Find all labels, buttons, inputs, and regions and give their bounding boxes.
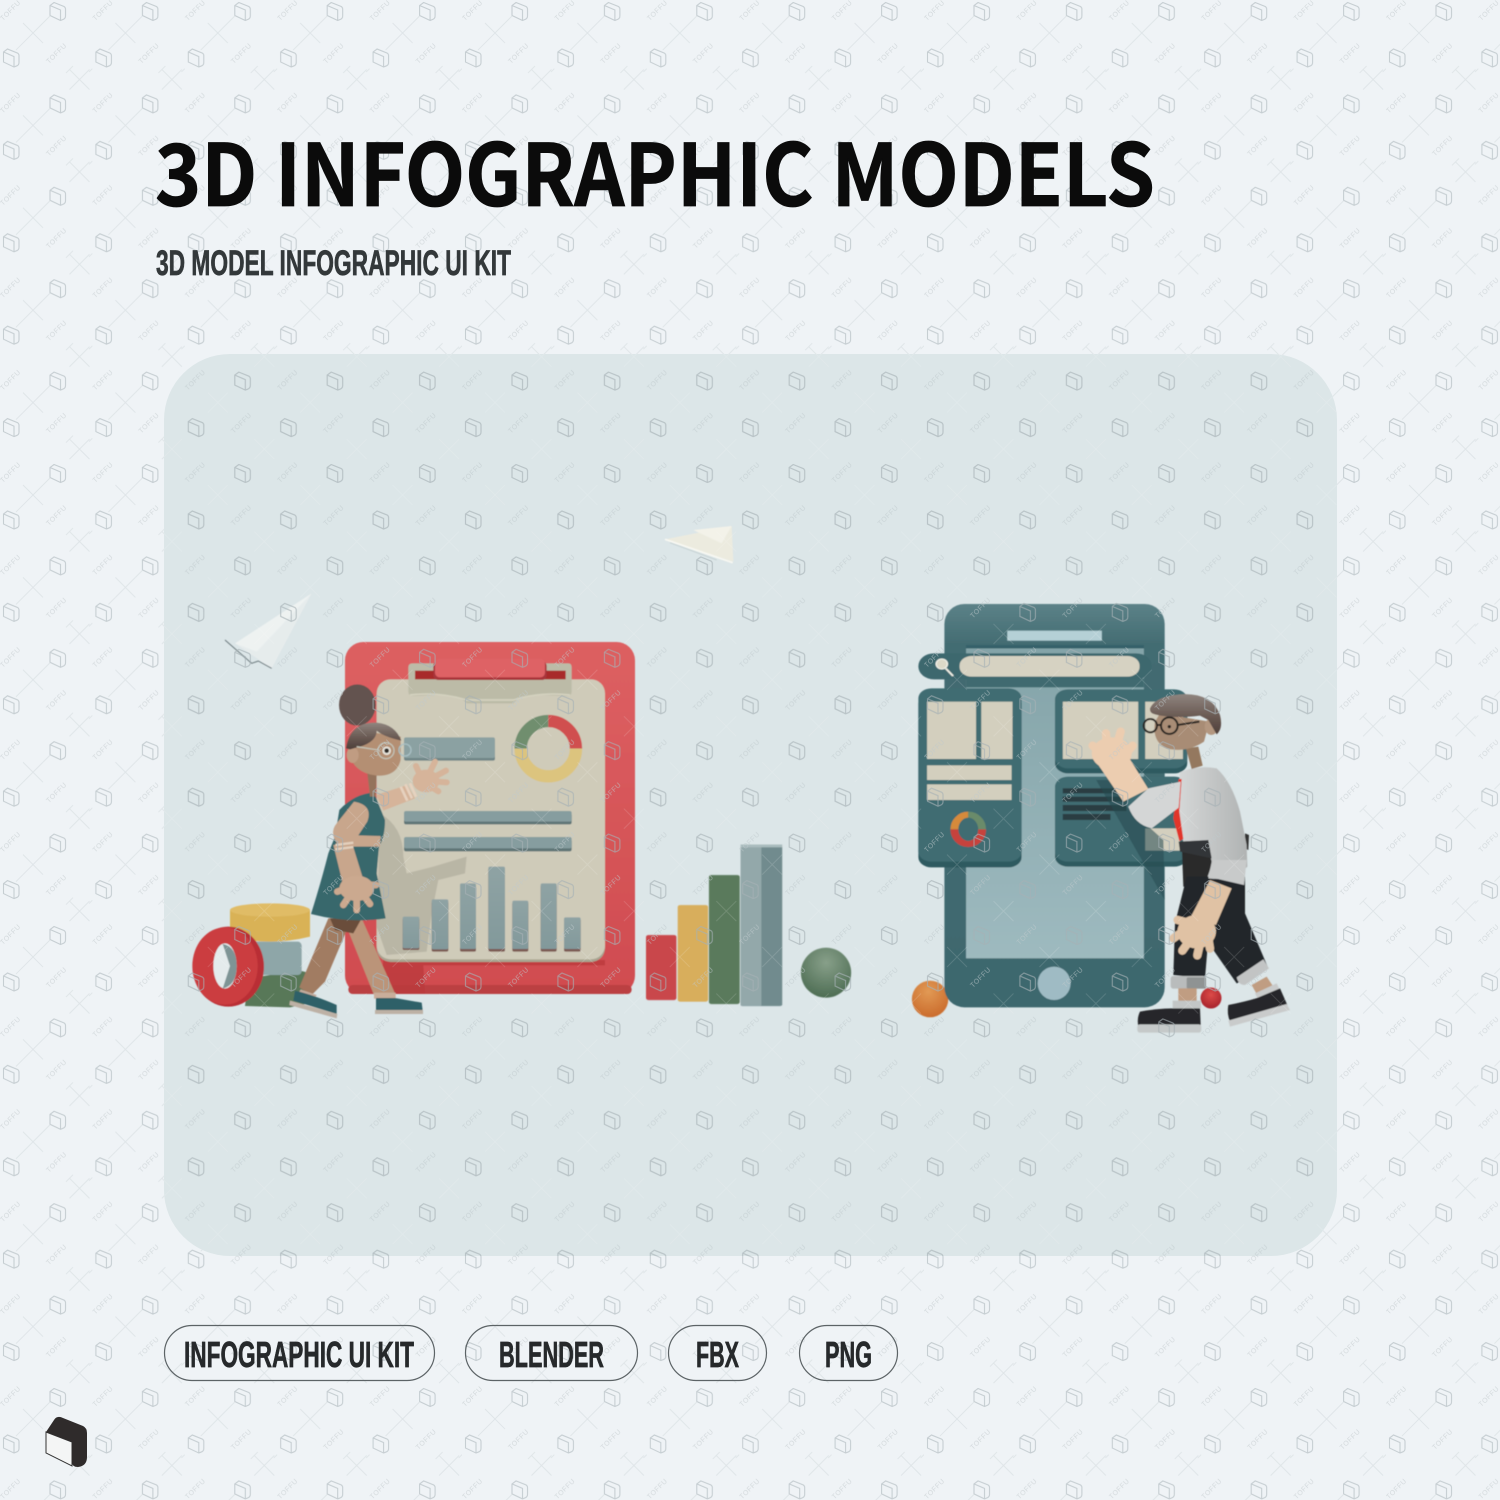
- ankles: [1178, 977, 1273, 1002]
- right lower card: [1055, 777, 1187, 867]
- clipboard: [345, 642, 635, 994]
- bun: [339, 684, 376, 726]
- green bar: [709, 875, 740, 1004]
- left shoe: [1137, 1001, 1201, 1033]
- cuffs: [1171, 959, 1269, 989]
- search bar: [918, 653, 1152, 687]
- panel: artwork backdrop: [164, 354, 1337, 1256]
- text lines: [404, 811, 572, 851]
- rolled sleeve: [1208, 860, 1247, 885]
- woman character: [289, 684, 447, 1018]
- paper plane: left: [225, 593, 312, 668]
- watermark overlay on panel: [164, 354, 1337, 1256]
- head: [346, 723, 411, 776]
- mini bar chart: [403, 867, 581, 952]
- man shadow on phone: [1096, 780, 1165, 900]
- brand logo: [46, 1417, 87, 1467]
- right shoe: [1228, 983, 1290, 1027]
- pill: Blender: BLENDER: [499, 1334, 604, 1375]
- trousers, hand and shoes: [1137, 877, 1290, 1033]
- woman shadow on paper: [377, 813, 467, 955]
- pill: PNG: PNG: [825, 1334, 872, 1375]
- trousers: [1173, 877, 1268, 983]
- red tie: [1173, 779, 1183, 841]
- red sphere: [1200, 988, 1222, 1008]
- grey bar: [741, 845, 782, 1006]
- torso, arm and head: [1092, 694, 1247, 885]
- pill: Infographic UI Kit: INFOGRAPHIC UI KIT: [184, 1334, 414, 1375]
- left card: [918, 688, 1022, 867]
- raised arm: [1092, 732, 1181, 828]
- pill: PNG: [800, 1326, 898, 1380]
- trousers upper: [1182, 833, 1249, 887]
- arm on hip: [333, 802, 381, 910]
- man character: [1092, 694, 1290, 1033]
- title: 3D INFOGRAPHIC MODELS: [155, 106, 1155, 231]
- glasses: [1144, 717, 1199, 734]
- yellow cylinder: [230, 903, 310, 942]
- right upper card: [1055, 689, 1187, 773]
- yellow bar: [678, 905, 708, 1002]
- pill: FBX: FBX: [696, 1334, 739, 1375]
- orange sphere: [912, 981, 948, 1017]
- top speaker bar: [1007, 631, 1102, 641]
- home button: [1038, 967, 1071, 1000]
- waistband: [1179, 840, 1212, 858]
- paper plane: top: [665, 526, 733, 563]
- legs: [299, 918, 395, 995]
- teal block: [247, 942, 302, 975]
- glasses: [357, 743, 411, 759]
- shoes: [289, 989, 423, 1018]
- smartphone: [918, 604, 1187, 1007]
- phone donut: [954, 815, 982, 844]
- lowered arm and hand: [1173, 880, 1232, 955]
- red ring: [192, 927, 264, 1007]
- bar chart blocks: [646, 845, 948, 1017]
- donut chart: [521, 721, 576, 776]
- head: [1144, 694, 1221, 769]
- shirt: [1177, 767, 1247, 879]
- raised arm: [376, 762, 447, 811]
- neck: [367, 773, 377, 797]
- subtitle: 3D MODEL INFOGRAPHIC UI KIT: [156, 244, 511, 283]
- green block: [245, 971, 310, 1007]
- text bar: [404, 737, 495, 761]
- red bar: [646, 935, 676, 1000]
- clipboard clip: [408, 659, 572, 703]
- 3D illustration scene: [192, 526, 1290, 1033]
- screen: [966, 648, 1144, 958]
- pill: Infographic UI Kit: [164, 1326, 434, 1380]
- dress: [311, 793, 386, 920]
- stacked blocks and ring: [192, 903, 310, 1007]
- green sphere: [801, 948, 851, 998]
- pill: Blender: [466, 1326, 638, 1380]
- pill: FBX: [668, 1326, 766, 1380]
